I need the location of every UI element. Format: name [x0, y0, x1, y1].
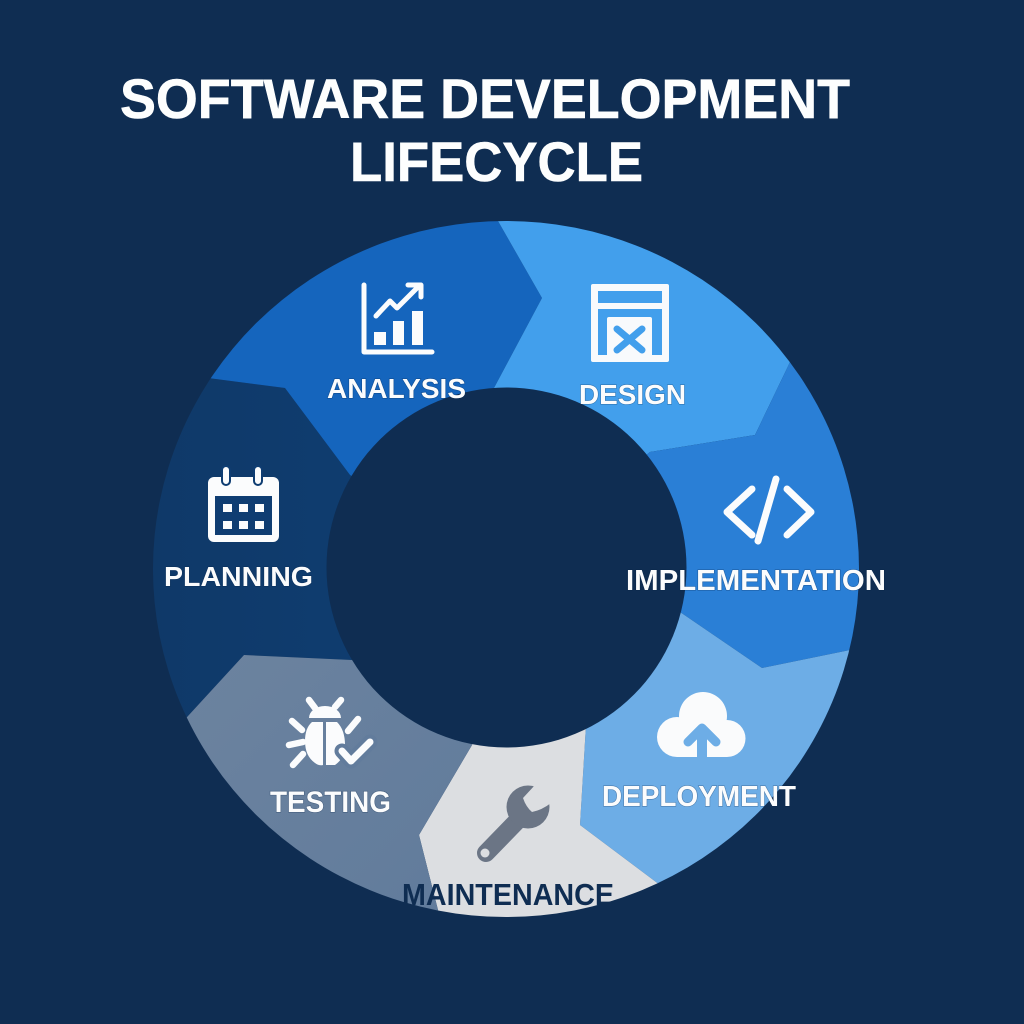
- icon: code brackets: [727, 479, 811, 541]
- panel: testing segment: [186, 655, 472, 910]
- panel: implementation segment: [646, 362, 859, 668]
- panel: planning segment: [153, 378, 352, 718]
- label: planning: PLANNING: [164, 561, 313, 592]
- panel: analysis segment: [210, 221, 542, 476]
- icon: analysis chart: [364, 285, 432, 352]
- center hole: [326, 388, 686, 748]
- icon: calendar: [208, 470, 279, 542]
- title: SOFTWARE DEVELOPMENT: [120, 67, 850, 130]
- title: LIFECYCLE: [350, 130, 643, 193]
- label: implementation: IMPLEMENTATION: [626, 565, 886, 597]
- panel: deployment segment: [580, 612, 850, 884]
- panel: maintenance segment: [419, 729, 658, 917]
- label: testing: TESTING: [270, 786, 391, 819]
- label: maintenance: MAINTENANCE: [402, 877, 614, 912]
- icon: design window: [591, 284, 669, 362]
- label: deployment: DEPLOYMENT: [602, 781, 796, 813]
- panel: design segment: [494, 221, 790, 454]
- icon: bug with check: [289, 700, 370, 765]
- icon: cloud upload: [657, 692, 746, 758]
- label: design: DESIGN: [579, 379, 686, 410]
- icon: wrench: [480, 780, 562, 858]
- label: analysis: ANALYSIS: [327, 373, 466, 404]
- title: [120, 67, 850, 193]
